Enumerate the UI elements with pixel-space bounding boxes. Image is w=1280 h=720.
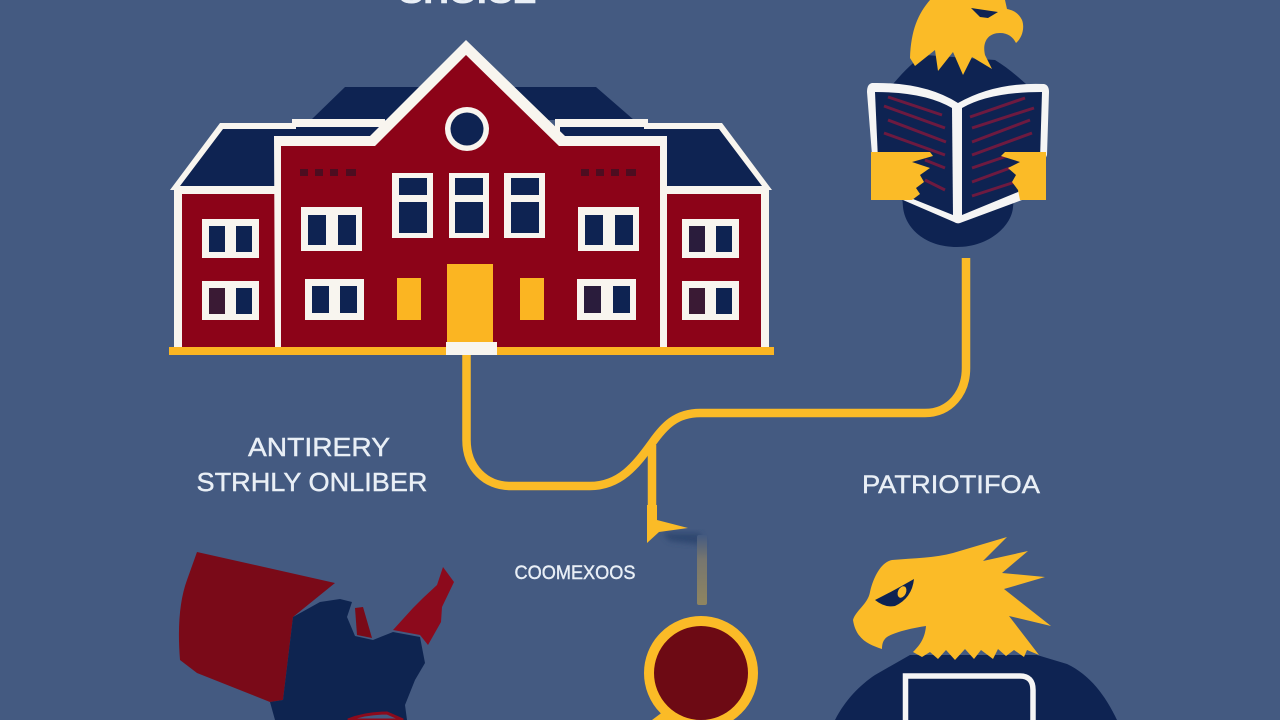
icon: school building xyxy=(169,40,774,355)
gold door and side panels xyxy=(397,264,544,344)
arrowhead xyxy=(647,505,688,543)
label: coomexoos: COOMEXOOS xyxy=(514,563,636,584)
central block with gable xyxy=(274,40,667,347)
eagle head xyxy=(910,0,1023,75)
gold base line xyxy=(169,347,774,355)
icon: eagle with laptop xyxy=(835,537,1117,720)
laptop outline xyxy=(906,676,1033,720)
right wing wall xyxy=(665,187,769,347)
gable round window xyxy=(445,107,489,151)
right claw xyxy=(1001,152,1046,200)
Great Lakes state xyxy=(355,607,372,638)
connector line: building to eagle reader xyxy=(466,258,966,525)
western states xyxy=(179,552,335,702)
brick dots xyxy=(300,169,636,176)
central and southern states xyxy=(270,599,425,720)
left claw xyxy=(871,152,933,200)
icon: eagle reading a book xyxy=(867,0,1049,247)
second-row windows xyxy=(202,207,739,258)
eagle eye xyxy=(875,579,914,606)
door step xyxy=(446,342,497,355)
eagle body xyxy=(835,655,1117,720)
label: antirery stehly onliber: STRHLY ONLIBER xyxy=(196,467,428,497)
ground-floor windows xyxy=(202,279,739,320)
eagle head with crest xyxy=(853,537,1051,660)
label: patriotifoa: PATRIOTIFOA xyxy=(862,471,1040,499)
open book xyxy=(867,83,1049,223)
left wing roof xyxy=(170,119,385,190)
eagle body xyxy=(893,55,1026,247)
label: antirery stehly onliber xyxy=(196,432,428,497)
arrow shadow xyxy=(662,533,704,545)
fading connector stem xyxy=(697,535,707,605)
north-eastern states xyxy=(393,567,454,645)
icon: United States map xyxy=(179,552,454,720)
right wing roof xyxy=(555,119,772,190)
left wing wall xyxy=(174,187,276,347)
upper centre windows xyxy=(392,173,545,238)
icon: gold ring circle xyxy=(649,621,753,720)
label: antirery stehly onliber: ANTIRERY xyxy=(248,432,390,462)
back roof xyxy=(311,87,634,120)
gulf coast cutout xyxy=(348,713,403,720)
book text lines xyxy=(884,97,1034,196)
eagle eye xyxy=(971,8,998,18)
